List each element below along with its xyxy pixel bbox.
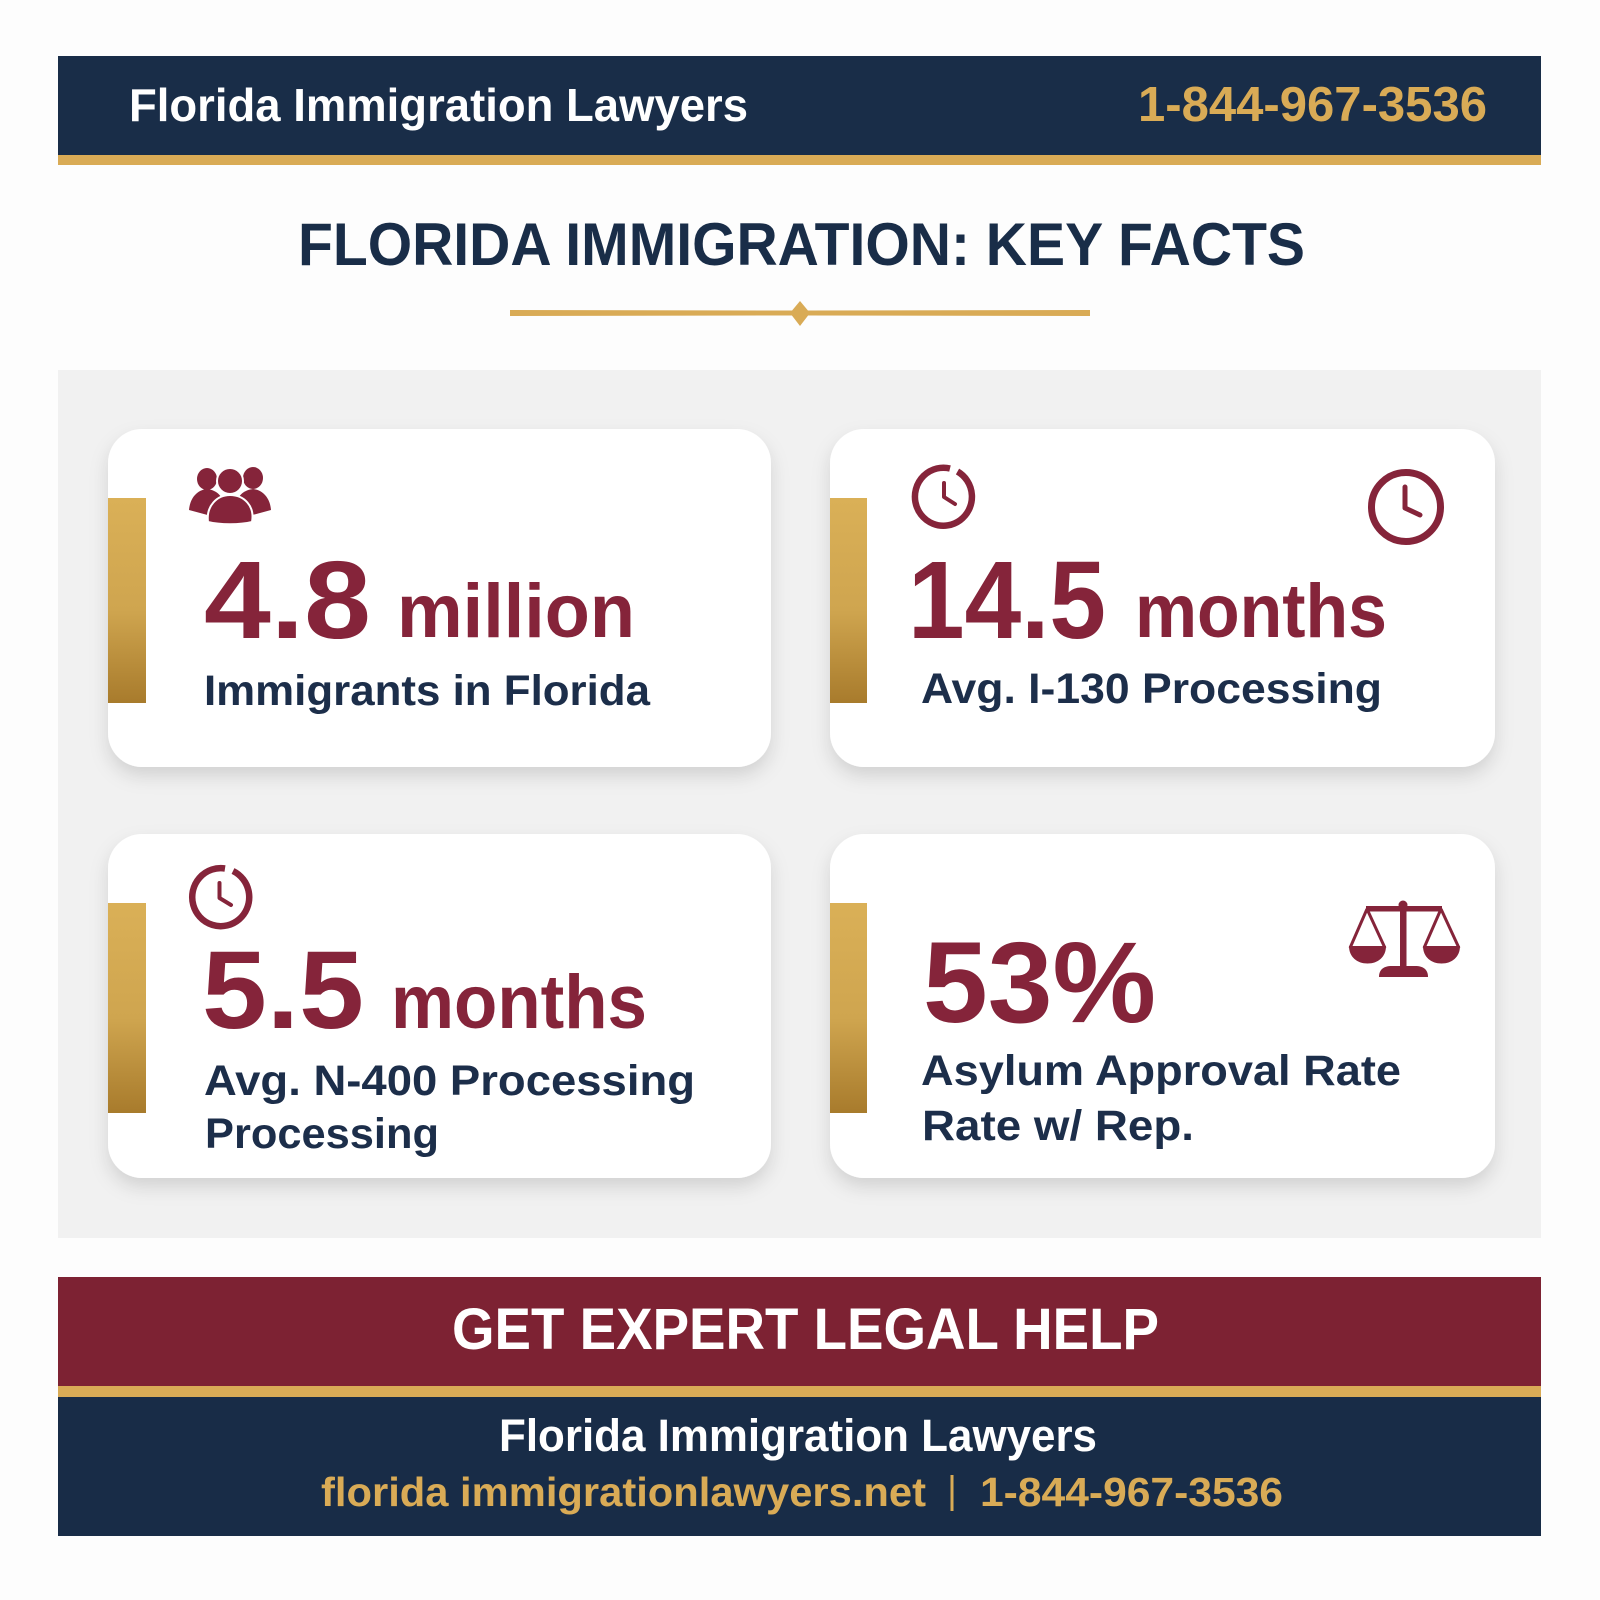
gold accent bar bbox=[830, 903, 867, 1113]
gold accent bar bbox=[830, 498, 867, 703]
card: 4.8 million immigrants bbox=[108, 429, 771, 767]
icon: clock bbox=[192, 868, 249, 926]
stat unit: months bbox=[391, 960, 647, 1045]
stat unit: months bbox=[1135, 569, 1387, 654]
stat value: 14.5 bbox=[908, 539, 1106, 662]
stat label: Immigrants in Florida bbox=[204, 667, 651, 715]
stat value: 5.5 bbox=[202, 929, 364, 1052]
stat value: 53% bbox=[923, 919, 1156, 1047]
title: FLORIDA IMMIGRATION: KEY FACTS bbox=[298, 211, 1305, 278]
footer website: florida immigrationlawyers.net bbox=[321, 1469, 926, 1515]
stat unit: million bbox=[397, 569, 635, 654]
footer contact block bbox=[58, 1386, 1541, 1536]
header bar bbox=[58, 56, 1541, 165]
card: 14.5 months I-130 bbox=[830, 429, 1495, 767]
call to action text: GET EXPERT LEGAL HELP bbox=[452, 1297, 1159, 1362]
footer firm name: Florida Immigration Lawyers bbox=[499, 1410, 1097, 1461]
gold accent bar bbox=[108, 498, 146, 703]
call to action banner bbox=[58, 1277, 1541, 1386]
gold accent bar bbox=[108, 903, 146, 1113]
icon: people bbox=[189, 467, 271, 524]
icon: small clock bbox=[915, 468, 972, 526]
stat label: Rate w/ Rep. bbox=[922, 1102, 1194, 1150]
stat label: Asylum Approval Rate bbox=[921, 1047, 1401, 1095]
stat label: Avg. N-400 Processing bbox=[204, 1057, 695, 1105]
card: 53% asylum approval bbox=[830, 834, 1495, 1178]
footer phone number: 1-844-967-3536 bbox=[980, 1469, 1283, 1515]
stat label: Processing bbox=[205, 1110, 439, 1158]
icon: scales of justice bbox=[1349, 900, 1460, 977]
header phone number: 1-844-967-3536 bbox=[1138, 78, 1487, 132]
stat value: 4.8 bbox=[204, 539, 371, 662]
panel: key facts bbox=[58, 370, 1541, 1238]
header firm name: Florida Immigration Lawyers bbox=[129, 79, 748, 131]
card: 5.5 months N-400 bbox=[108, 834, 771, 1178]
stat label: Avg. I-130 Processing bbox=[921, 665, 1382, 713]
footer separator bbox=[950, 1475, 954, 1511]
title divider with diamond bbox=[510, 301, 1090, 326]
stat label bbox=[204, 1057, 695, 1158]
stat label bbox=[921, 1047, 1401, 1150]
icon: large clock bbox=[1372, 472, 1440, 542]
